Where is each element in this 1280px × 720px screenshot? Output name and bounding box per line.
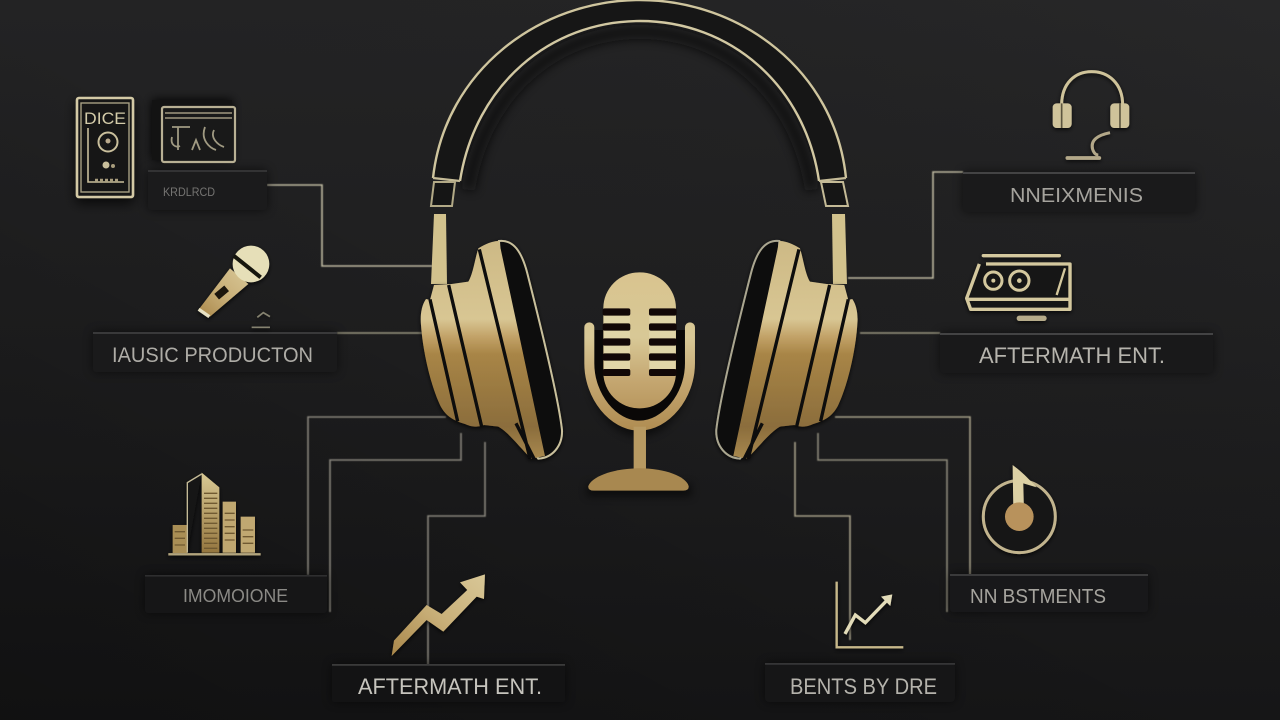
center microphone [587, 272, 692, 497]
icon: screen panel [152, 100, 235, 162]
icon: album card [77, 98, 133, 197]
icon: album card: DICE [84, 109, 126, 128]
headband inner shadow [468, 32, 812, 190]
headband [431, 0, 848, 284]
microphone shadow [587, 353, 692, 497]
label: music production [93, 332, 337, 372]
headphones [421, 0, 858, 459]
label: lower-left: IMOMOIONE [183, 586, 288, 606]
label: aftermath ent bottom: AFTERMATH ENT. [358, 674, 542, 699]
icon: music note dial [983, 465, 1055, 553]
label: music production: IAUSIC PRODUCTON [112, 344, 313, 367]
cradle [589, 327, 690, 426]
icon: headset [1053, 72, 1129, 158]
base [588, 468, 689, 491]
icon: buildings [168, 473, 261, 554]
left ear cup [421, 241, 562, 459]
label: top-right [963, 172, 1195, 212]
label: beats by dre [765, 663, 955, 702]
label: investments: NN BSTMENTS [970, 586, 1106, 608]
capsule [603, 272, 676, 408]
microphone head [233, 246, 269, 282]
label: top-left small [148, 170, 267, 210]
label: investments [950, 574, 1148, 612]
icon: handheld microphone [198, 246, 270, 327]
microphone body [198, 268, 248, 317]
cradle dark interior [594, 330, 685, 422]
icon: turntable [967, 256, 1070, 318]
icon: line chart [837, 582, 903, 647]
label: aftermath ent right [940, 333, 1213, 373]
label: aftermath ent bottom [332, 664, 565, 702]
label: beats by dre: BENTS BY DRE [790, 674, 937, 699]
label: aftermath ent right: AFTERMATH ENT. [979, 343, 1165, 368]
label: top-left small: KRDLRCD [163, 185, 215, 199]
capsule grille [603, 308, 677, 377]
label: top-right: NNEIXMENIS [1010, 185, 1143, 207]
right ear cup [716, 241, 858, 459]
connector lines [267, 172, 970, 665]
stem [634, 427, 646, 471]
icon: growth arrow [392, 574, 485, 656]
label: lower-left [145, 575, 327, 613]
